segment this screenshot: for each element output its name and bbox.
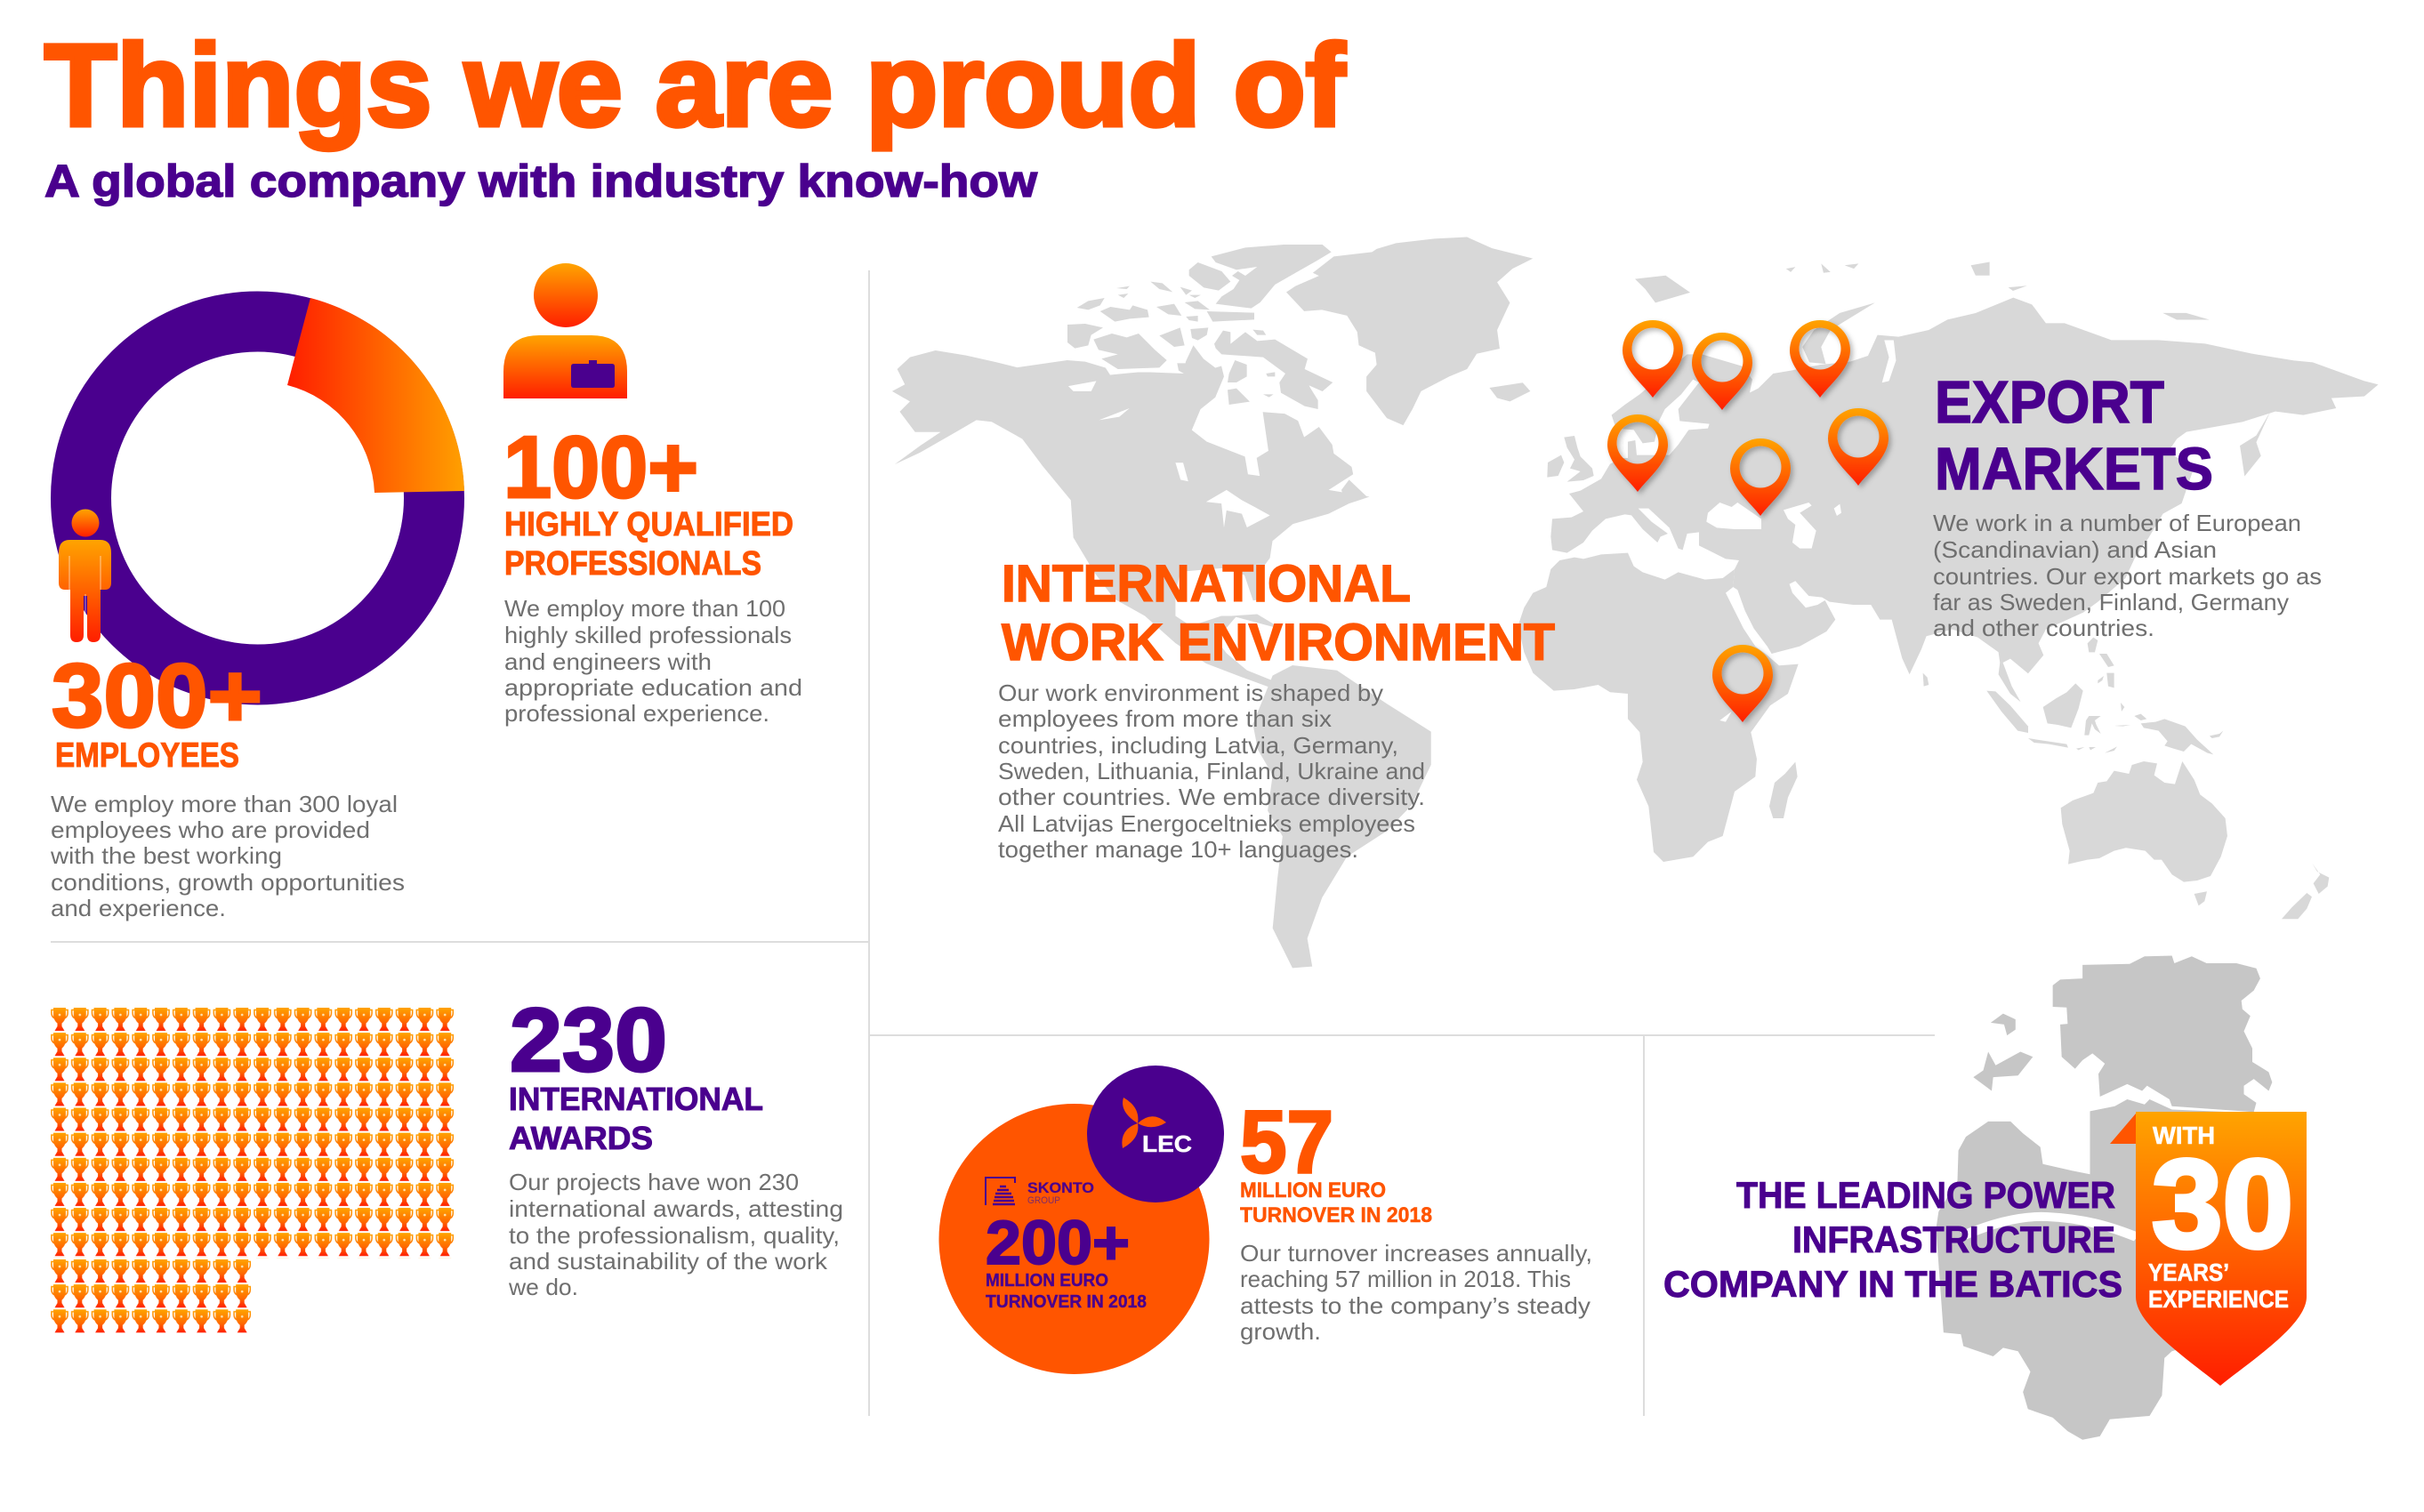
- ribbon: 30 years experience: [2110, 1112, 2307, 1386]
- text: export markets description: far as Sweden, Finland, Germany: [1933, 589, 2289, 615]
- map: baltic states: [1936, 956, 2291, 1440]
- panel: baltics: [1663, 956, 2307, 1440]
- panel dividers: [51, 270, 1935, 1416]
- label: million euro turnover company: TURNOVER IN 2018: [1240, 1203, 1432, 1227]
- text: turnover description: [1240, 1240, 1592, 1345]
- heading: export markets: MARKETS: [1935, 436, 2213, 503]
- text: professionals description: [504, 595, 802, 727]
- label: million euro turnover group: MILLION EURO: [986, 1271, 1108, 1291]
- ribbon: 30 years experience: YEARS’: [2148, 1259, 2229, 1286]
- text: awards description: international awards, attesting: [509, 1195, 843, 1222]
- donut chart: [81, 298, 464, 674]
- text: work environment description: countries, including Latvia, Germany,: [998, 732, 1398, 759]
- canadian arctic islands: [1067, 245, 1333, 409]
- text: employees description: We employ more than 300 loyal: [51, 791, 398, 817]
- text: turnover description: growth.: [1240, 1318, 1321, 1345]
- north america and greenland: [892, 237, 1690, 688]
- panel: professionals: [503, 263, 802, 727]
- logo: Skonto Group: [986, 1178, 1094, 1206]
- text: export markets description: and other countries.: [1933, 615, 2154, 641]
- logo: Skonto Group: SKONTO: [1027, 1179, 1094, 1196]
- heading: international awards: INTERNATIONAL: [509, 1081, 763, 1117]
- text: employees description: with the best working: [50, 842, 282, 869]
- ribbon: 30 years experience: EXPERIENCE: [2148, 1285, 2289, 1313]
- text: employees description: conditions, growth opportunities: [51, 869, 405, 896]
- heading: international awards: [509, 1081, 763, 1156]
- stat: 230: 230: [510, 991, 667, 1090]
- subtitle: A global company with industry know-how: [44, 156, 1037, 206]
- heading: export markets: EXPORT: [1935, 369, 2164, 436]
- panel: international work environment: [998, 555, 1555, 863]
- heading: highly qualified professionals: PROFESSIONALS: [504, 545, 761, 583]
- text: employees description: [50, 791, 405, 921]
- label: million euro turnover group: TURNOVER IN 2018: [986, 1292, 1147, 1312]
- panel: awards: [51, 991, 843, 1334]
- icon: professional with briefcase: [503, 263, 627, 398]
- heading: international work environment: INTERNATIONAL: [1002, 555, 1411, 613]
- orange circle: [939, 1104, 1210, 1374]
- heading: leading power infrastructure company: [1663, 1174, 2122, 1305]
- text: work environment description: [998, 680, 1425, 863]
- stat: 57: 57: [1240, 1092, 1333, 1191]
- icon: standing person: [59, 509, 111, 642]
- text: export markets description: countries. Our export markets go as: [1933, 563, 2322, 590]
- text: work environment description: Our work environment is shaped by: [998, 680, 1383, 706]
- heading: employees: EMPLOYEES: [55, 736, 239, 775]
- purple circle: LEC logo: [1087, 1066, 1224, 1202]
- text: work environment description: Sweden, Lithuania, Finland, Ukraine and: [998, 758, 1425, 784]
- text: turnover description: reaching 57 million in 2018. This: [1240, 1266, 1571, 1292]
- heading: leading power infrastructure company: THE LEADING POWER: [1736, 1174, 2115, 1216]
- map pins: [1607, 320, 1888, 722]
- text: export markets description: [1933, 510, 2322, 641]
- ribbon: 30 years experience: WITH: [2153, 1122, 2215, 1149]
- text: work environment description: employees from more than six: [998, 705, 1332, 732]
- heading: leading power infrastructure company: INFRASTRUCTURE: [1792, 1218, 2115, 1260]
- heading: export markets: [1935, 369, 2213, 503]
- heading: highly qualified professionals: [504, 506, 793, 583]
- world map: [892, 237, 2379, 968]
- text: work environment description: other countries. We embrace diversity.: [998, 784, 1425, 810]
- label: million euro turnover company: [1240, 1178, 1432, 1227]
- text: professionals description: professional experience.: [504, 700, 769, 727]
- text: awards description: and sustainability of the work: [509, 1248, 828, 1275]
- panel: export markets: [1933, 369, 2322, 641]
- text: employees description: and experience.: [51, 895, 226, 921]
- text: professionals description: appropriate education and: [504, 674, 802, 701]
- heading: international work environment: WORK ENVIRONMENT: [1002, 614, 1555, 672]
- label: million euro turnover group: [986, 1271, 1147, 1312]
- trophy pictogram grid: [51, 1008, 456, 1334]
- text: export markets description: We work in a number of European: [1933, 510, 2301, 536]
- africa, europe and asia: [1518, 298, 2379, 862]
- label: million euro turnover company: MILLION EURO: [1240, 1178, 1386, 1202]
- stat: 300+: 300+: [52, 647, 262, 746]
- text: awards description: we do.: [508, 1274, 578, 1300]
- text: export markets description: (Scandinavian) and Asian: [1933, 536, 2217, 563]
- text: awards description: [508, 1169, 843, 1300]
- title: Things we are proud of: [44, 20, 1345, 150]
- text: turnover description: attests to the company’s steady: [1240, 1292, 1590, 1319]
- heading: leading power infrastructure company: COMPANY IN THE BATICS: [1663, 1263, 2122, 1305]
- text: awards description: to the professionalism, quality,: [509, 1222, 840, 1249]
- panel: turnover: [939, 1066, 1592, 1374]
- text: employees description: employees who are provided: [51, 816, 370, 843]
- text: turnover description: Our turnover increases annually,: [1240, 1240, 1592, 1267]
- stat: 200+: 200+: [986, 1208, 1130, 1277]
- south america: [1252, 665, 1431, 968]
- text: work environment description: together manage 10+ languages.: [998, 836, 1358, 863]
- text: awards description: Our projects have won 230: [509, 1169, 799, 1195]
- text: professionals description: and engineers with: [504, 648, 712, 675]
- arctic russia islands: [1786, 261, 2270, 477]
- heading: international awards: AWARDS: [509, 1120, 653, 1156]
- panel: employees: [50, 298, 464, 921]
- logo: Skonto Group: GROUP: [1027, 1195, 1060, 1206]
- text: professionals description: highly skilled professionals: [504, 622, 792, 648]
- heading: international work environment: [1002, 555, 1555, 672]
- purple circle: LEC logo: LEC: [1142, 1130, 1192, 1157]
- text: professionals description: We employ more than 100: [504, 595, 785, 622]
- heading: highly qualified professionals: HIGHLY QUALIFIED: [504, 506, 793, 543]
- stat: 100+: 100+: [503, 418, 698, 516]
- text: work environment description: All Latvijas Energoceltnieks employees: [998, 810, 1415, 837]
- ribbon: 30 years experience: 30: [2152, 1133, 2293, 1274]
- southeast asia and oceania: [1986, 638, 2329, 919]
